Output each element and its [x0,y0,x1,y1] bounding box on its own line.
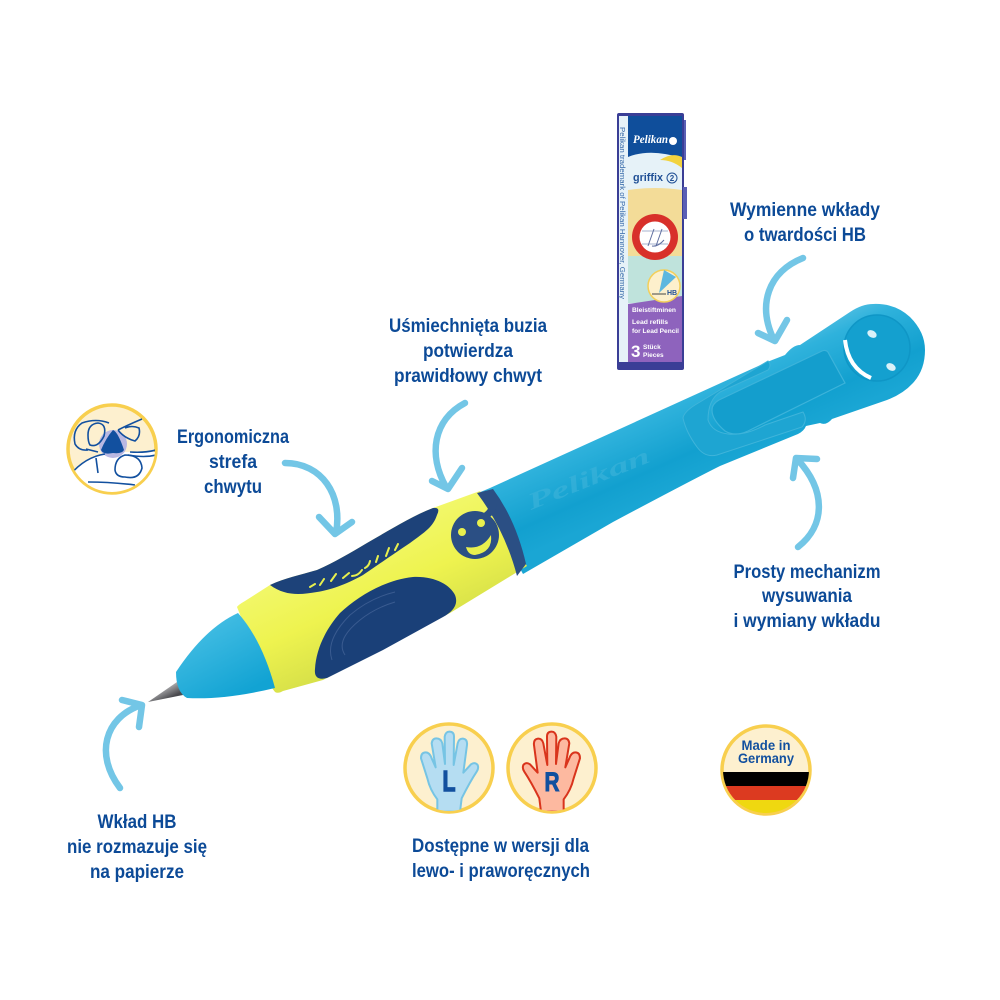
pack: logo: Pelikan [633,134,668,146]
arrow: grip zone [285,463,352,534]
pack: purple label text: Lead refills [632,319,668,326]
arrow: tip [106,700,142,788]
pencil: clip [712,350,845,434]
label: lead: nie rozmazuje się [67,836,207,858]
label: smile: potwierdza [423,340,513,362]
pencil: engraved logo: Pelikan [522,443,653,515]
label: lead: na papierze [90,861,184,883]
pack: red seal [632,214,678,260]
pack: griffix: 2 [670,174,675,183]
pack: HB badge: HB [667,290,677,297]
label: lead: Wkład HB [98,811,176,833]
pencil: dark band [477,489,526,576]
label: grip zone: chwytu [204,476,262,498]
pencil: lower dark grip [315,577,456,679]
pack: purple label text: for Lead Pencil [632,328,679,335]
label: mechanism: wysuwania [761,585,852,607]
label: grip zone: strefa [209,451,257,473]
icon: right hand badge: R [544,767,560,797]
pack: HB badge [648,270,680,302]
pack: purple label text [631,307,679,361]
pencil: cap head with smile [844,315,910,381]
label: left and right handed [412,835,590,882]
pack: spine text: Pelikan trademark of Pelikan Hannover, Germany [618,127,627,299]
label: left and right handed: lewo- i praworęcznych [412,860,590,882]
icon: left hand badge [405,724,493,812]
arrow: mechanism [793,458,819,547]
label: grip zone [177,426,289,498]
pencil: upper dark grip [270,508,438,594]
label: refill: o twardości HB [744,224,866,246]
label: mechanism: i wymiany wkładu [734,610,880,632]
pencil: clip recess [683,361,805,456]
icon: made in Germany badge: Made in [742,738,790,753]
icon: made in Germany badge: Germany [738,751,794,766]
label: smile: prawidłowy chwyt [394,365,542,387]
icon: left hand badge: L [442,766,456,798]
label: mechanism: Prosty mechanizm [734,561,880,583]
pencil [148,304,925,702]
pencil: smiley [451,503,499,559]
label: lead [67,811,207,883]
icon: ergonomic grip badge [68,405,156,495]
pack: purple label text: Bleistiftminen [632,307,676,314]
label: left and right handed: Dostępne w wersji dla [412,835,589,857]
pack: purple label text: Pieces [643,352,664,359]
pack: griffix: griffix [633,172,664,184]
pack: purple label text: Stück [643,344,661,351]
pencil: metal tip [148,682,183,702]
pack: purple label text: 3 [631,342,640,361]
label: refill: Wymienne wkłady [730,199,880,221]
icon: made in Germany badge [720,726,812,815]
lead refill pack [617,113,687,370]
arrow: smile [432,403,465,489]
pencil: blue cone [176,613,275,698]
label: refill [730,199,880,246]
arrow: refill [758,258,803,341]
pack: griffix [633,172,677,184]
label: smile: Uśmiechnięta buzia [389,315,547,337]
icon: right hand badge [508,724,596,812]
label: grip zone: Ergonomiczna [177,426,289,448]
label: smile [389,315,547,387]
pencil: blue barrel [478,304,925,574]
label: mechanism [734,561,880,632]
pencil: yellow grip [237,491,527,693]
